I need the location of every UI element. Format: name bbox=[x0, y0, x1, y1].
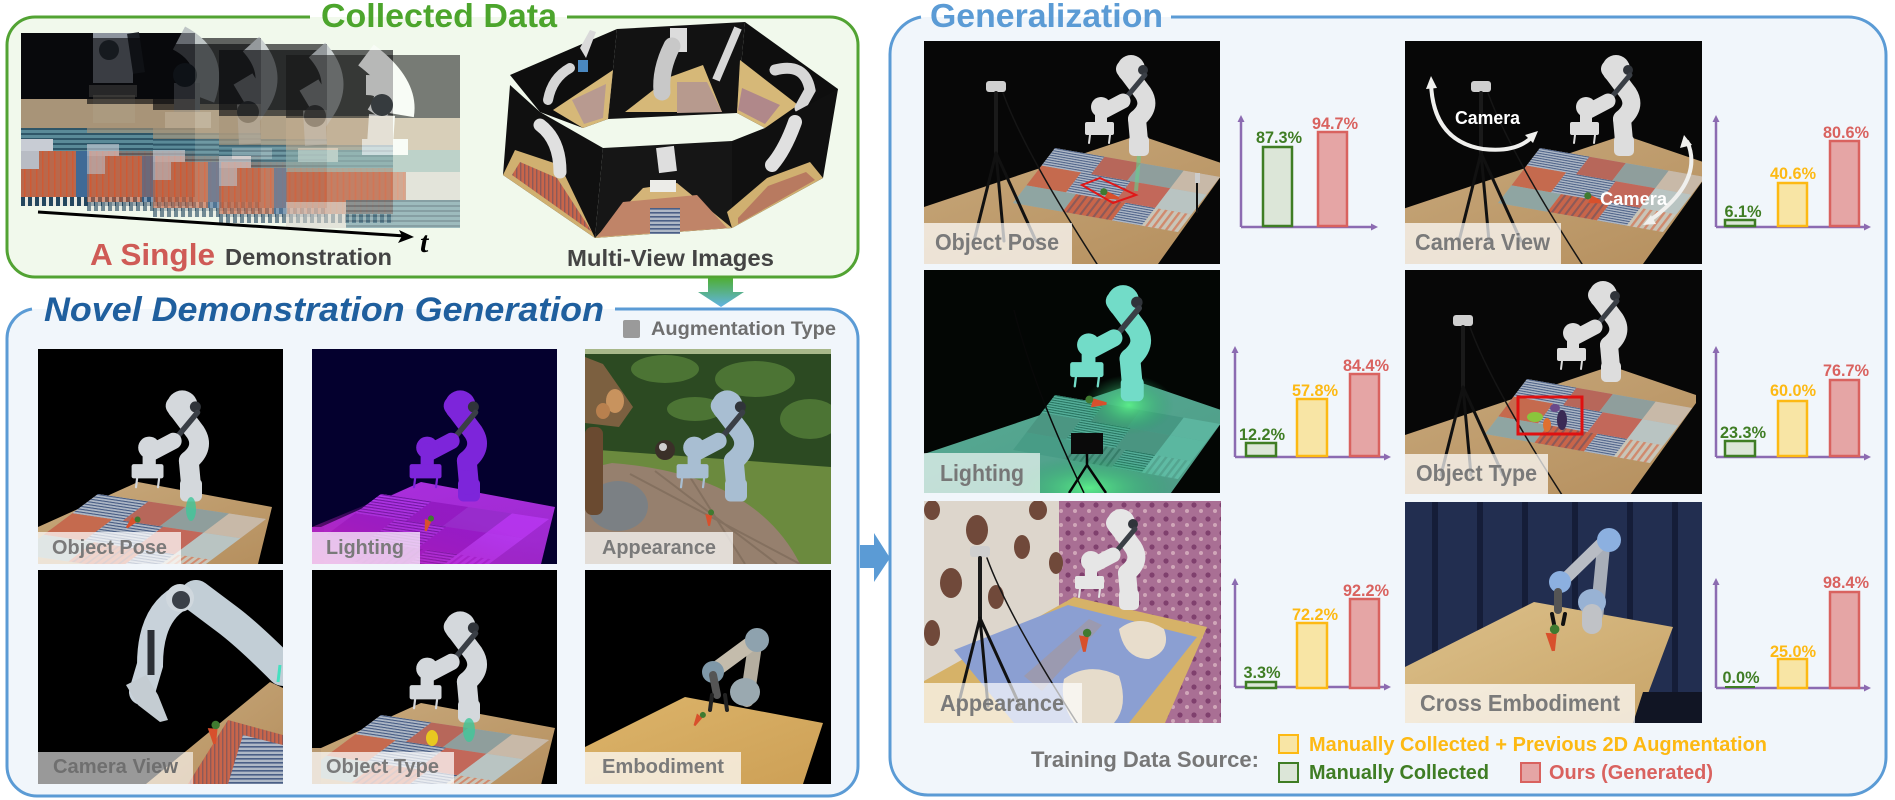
chart: object type: 23.3% bbox=[1720, 423, 1766, 442]
panel: generalization bbox=[890, 0, 1886, 795]
panel: collected data bbox=[7, 0, 858, 277]
chart: object pose: 94.7% bbox=[1312, 114, 1358, 133]
chart: object pose bbox=[1238, 114, 1378, 230]
image: camera view: Camera View bbox=[53, 756, 178, 778]
legend: training data source: Training Data Source: bbox=[1031, 747, 1259, 772]
photo: camera view: Camera bbox=[1455, 108, 1521, 128]
chart: camera view: 80.6% bbox=[1823, 123, 1869, 142]
heading: novel demonstration generation: Novel Demonstration Generation bbox=[44, 291, 604, 329]
multi-view ring bbox=[503, 22, 838, 238]
chart: lighting: 12.2% bbox=[1239, 425, 1285, 444]
frame 4 bbox=[219, 50, 393, 223]
panel: novel demonstration generation bbox=[7, 291, 858, 800]
chart: camera view: 40.6% bbox=[1770, 164, 1816, 183]
legend: training data source: Manually Collected bbox=[1309, 762, 1489, 784]
photo: object pose: Object Pose bbox=[935, 229, 1059, 255]
image: object type bbox=[312, 570, 557, 784]
image: lighting: Lighting bbox=[326, 537, 404, 559]
caption: demonstration: Demonstration bbox=[225, 244, 392, 270]
image: embodiment: Embodiment bbox=[602, 756, 724, 778]
chart: appearance bbox=[1232, 578, 1391, 690]
image: appearance bbox=[585, 349, 831, 564]
photo: appearance: Appearance bbox=[940, 690, 1064, 716]
chart: camera view: 6.1% bbox=[1724, 202, 1762, 221]
frame 3 bbox=[153, 44, 327, 217]
chart: cross embodiment: 98.4% bbox=[1823, 573, 1869, 592]
photo: camera view bbox=[1405, 41, 1702, 264]
image: object pose bbox=[38, 349, 283, 564]
chart: lighting bbox=[1232, 346, 1391, 460]
image: camera view bbox=[38, 570, 283, 784]
legend: augmentation type: Augmentation Type bbox=[651, 319, 836, 340]
chart: lighting: 57.8% bbox=[1292, 381, 1338, 400]
photo: lighting bbox=[924, 270, 1220, 493]
frame 1 bbox=[21, 33, 195, 206]
film strip: a single demonstration bbox=[21, 33, 460, 228]
chart: cross embodiment: 0.0% bbox=[1722, 668, 1760, 687]
legend: training data source bbox=[1031, 734, 1767, 784]
legend: training data source: Manually Collected + Previous 2D Augmentation bbox=[1309, 734, 1767, 756]
chart: appearance: 72.2% bbox=[1292, 605, 1338, 624]
caption: a single: A Single bbox=[90, 237, 215, 272]
photo: object type bbox=[1405, 270, 1702, 494]
image: lighting bbox=[312, 349, 557, 564]
chart: cross embodiment bbox=[1712, 573, 1871, 692]
chart: appearance: 92.2% bbox=[1343, 581, 1389, 600]
label: t: t bbox=[420, 226, 430, 259]
chart: camera view bbox=[1712, 115, 1871, 230]
image: object pose: Object Pose bbox=[52, 537, 167, 559]
photo: object pose bbox=[924, 41, 1220, 264]
chart: cross embodiment: 25.0% bbox=[1770, 642, 1816, 661]
image: embodiment bbox=[585, 570, 831, 784]
legend: training data source: Ours (Generated) bbox=[1549, 762, 1713, 784]
arrow: time axis bbox=[38, 212, 414, 243]
photo: cross embodiment: Cross Embodiment bbox=[1420, 690, 1620, 716]
chart: object type bbox=[1712, 346, 1871, 460]
image: appearance: Appearance bbox=[602, 537, 716, 559]
frame 2 bbox=[87, 38, 261, 211]
arrow: novel generation to generalization bbox=[860, 533, 890, 582]
chart: lighting: 84.4% bbox=[1343, 356, 1389, 375]
chart: object pose: 87.3% bbox=[1256, 128, 1302, 147]
photo: lighting: Lighting bbox=[940, 460, 1024, 486]
photo: cross embodiment bbox=[1405, 502, 1702, 723]
photo: camera view: Camera View bbox=[1415, 229, 1550, 255]
arrow: collected data to novel generation bbox=[698, 278, 744, 307]
image: object type: Object Type bbox=[326, 756, 439, 778]
chart: appearance: 3.3% bbox=[1244, 663, 1280, 682]
photo: camera view: Camera bbox=[1600, 189, 1668, 209]
chart: object type: 76.7% bbox=[1823, 361, 1869, 380]
caption: multi-view images: Multi-View Images bbox=[567, 245, 774, 271]
photo: object type: Object Type bbox=[1416, 460, 1537, 486]
photo: appearance bbox=[924, 501, 1221, 723]
chart: object type: 60.0% bbox=[1770, 381, 1816, 400]
frame 5 bbox=[286, 55, 460, 228]
